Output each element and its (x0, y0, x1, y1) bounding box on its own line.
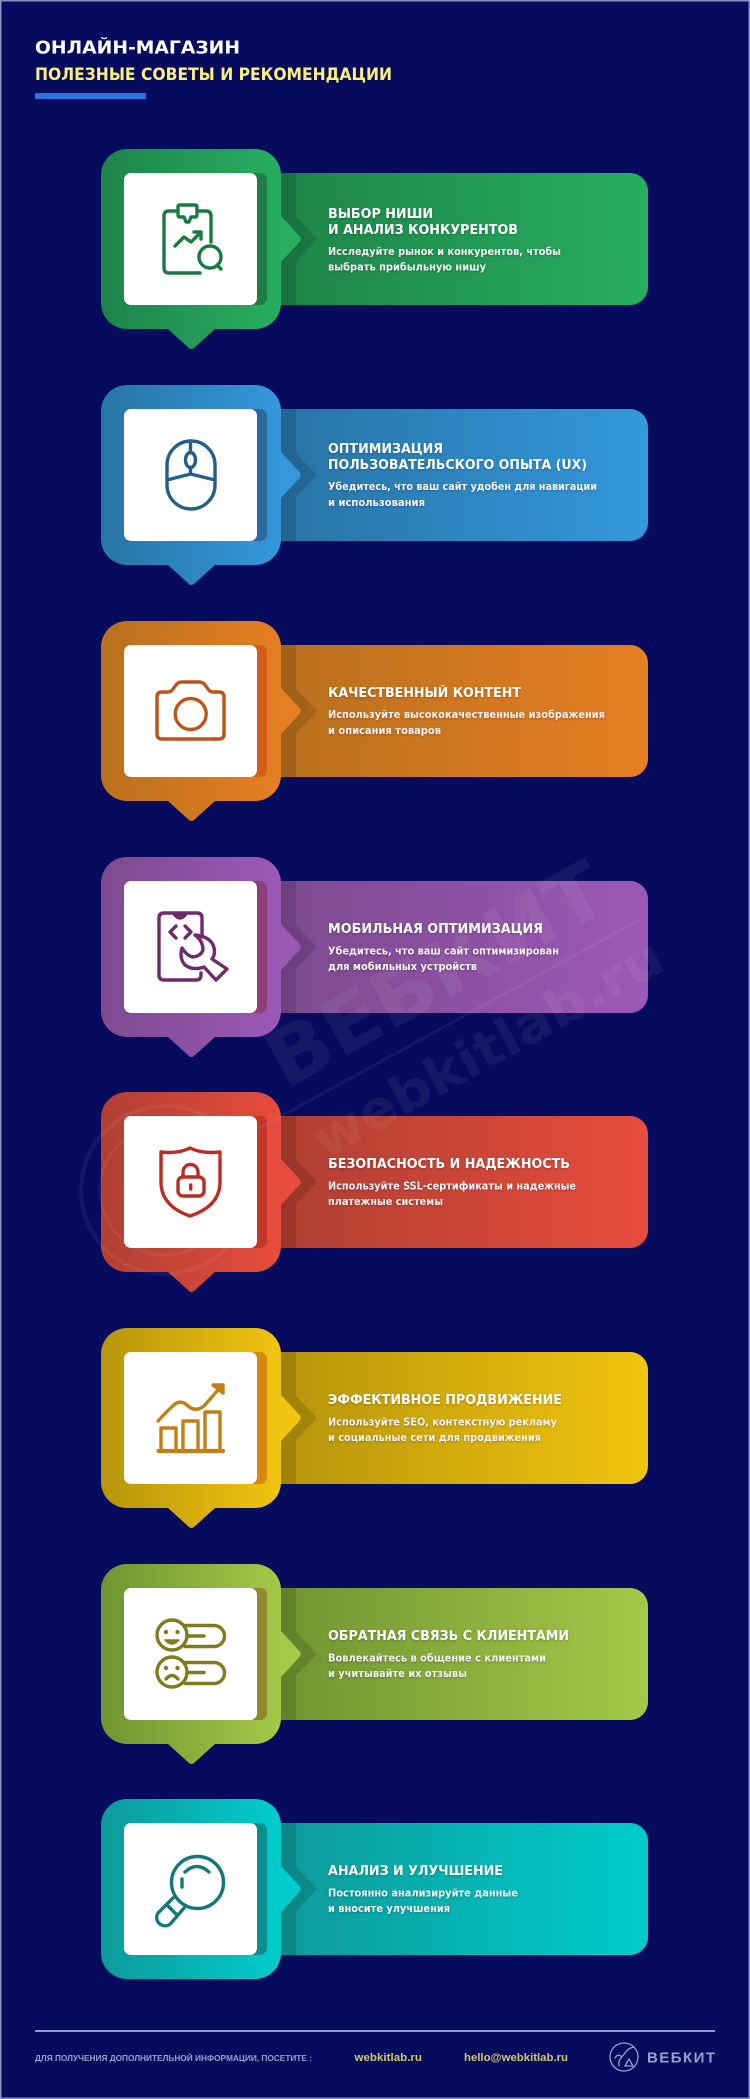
watermark: ВЕБКИТ (250, 845, 622, 1107)
text: promotion: и социальные сети для продвижения (328, 1431, 541, 1444)
text: niche selection: ВЫБОР НИШИ (328, 207, 433, 222)
text: mobile optimization: МОБИЛЬНАЯ ОПТИМИЗАЦИЯ (328, 922, 543, 937)
text: user experience: и использования (328, 496, 425, 509)
card 8: analysis (101, 1799, 648, 1979)
watermark (81, 845, 674, 1274)
card 4: mobile optimization (101, 857, 648, 1057)
text: niche selection: И АНАЛИЗ КОНКУРЕНТОВ (328, 223, 518, 238)
watermark: webkitlab.ru (302, 927, 674, 1171)
text: analysis (328, 1864, 518, 1915)
card 6: promotion (101, 1328, 648, 1528)
card 3: quality content (101, 621, 648, 821)
text: quality content: Используйте высококачественные изображения (328, 708, 605, 721)
website link: webkitlab.ru (353, 2052, 422, 2064)
text: user experience: ПОЛЬЗОВАТЕЛЬСКОГО ОПЫТА (UX) (328, 458, 587, 473)
text: security (328, 1157, 576, 1208)
icon: phone with wrench (159, 913, 227, 980)
icon: computer mouse (167, 441, 215, 509)
text: analysis: Постоянно анализируйте данные (328, 1887, 518, 1900)
text: analysis: АНАЛИЗ И УЛУЧШЕНИЕ (328, 1864, 503, 1879)
text: user experience (328, 442, 597, 509)
text: customer feedback: Вовлекайтесь в общение с клиентами (328, 1652, 546, 1665)
subtitle: ПОЛЕЗНЫЕ СОВЕТЫ И РЕКОМЕНДАЦИИ (35, 65, 392, 84)
icon: magnifying glass (157, 1856, 224, 1926)
icon: clipboard with chart and magnifier (164, 205, 221, 273)
header (35, 36, 392, 99)
logo wordmark: ВЕБКИТ (647, 2050, 715, 2067)
text: analysis: и вносите улучшения (328, 1902, 450, 1915)
text: user experience: ОПТИМИЗАЦИЯ (328, 442, 443, 457)
email link: hello@webkitlab.ru (464, 2052, 568, 2064)
text: customer feedback: ОБРАТНАЯ СВЯЗЬ С КЛИЕНТАМИ (328, 1629, 569, 1644)
text: customer feedback: и учитывайте их отзывы (328, 1667, 467, 1680)
icon: growth chart (158, 1385, 223, 1451)
text: promotion (328, 1393, 562, 1444)
text: mobile optimization (328, 922, 559, 973)
card 5: security (101, 1092, 648, 1292)
card 1: niche selection (101, 149, 648, 349)
title: ОНЛАЙН-МАГАЗИН (35, 36, 240, 58)
card 2: user experience (101, 385, 648, 585)
text: mobile optimization: для мобильных устройств (328, 960, 477, 973)
icon: feedback sliders with faces (157, 1620, 224, 1687)
text: niche selection (328, 207, 561, 274)
text: user experience: Убедитесь, что ваш сайт удобен для навигации (328, 480, 597, 493)
text: mobile optimization: Убедитесь, что ваш сайт оптимизирован (328, 945, 559, 958)
text: niche selection: Исследуйте рынок и конкурентов, чтобы (328, 245, 561, 258)
logo emblem (610, 2043, 638, 2071)
text: niche selection: выбрать прибыльную нишу (328, 260, 486, 274)
text: promotion: ЭФФЕКТИВНОЕ ПРОДВИЖЕНИЕ (328, 1393, 562, 1408)
icon: camera (157, 682, 224, 739)
footer note: ДЛЯ ПОЛУЧЕНИЯ ДОПОЛНИТЕЛЬНОЙ ИНФОРМАЦИИ, ПОСЕТИТЕ : (35, 2052, 312, 2063)
footer (35, 2030, 715, 2071)
icon: shield with lock (161, 1148, 220, 1216)
text: security: платежные системы (328, 1195, 443, 1208)
text: security: БЕЗОПАСНОСТЬ И НАДЕЖНОСТЬ (328, 1157, 570, 1172)
card 7: customer feedback (101, 1564, 648, 1764)
text: promotion: Используйте SEO, контекстную рекламу (328, 1416, 557, 1429)
accent bar (35, 93, 146, 99)
text: quality content (328, 685, 605, 737)
text: quality content: КАЧЕСТВЕННЫЙ КОНТЕНТ (328, 685, 521, 701)
text: customer feedback (328, 1629, 569, 1680)
text: quality content: и описания товаров (328, 724, 441, 737)
text: security: Используйте SSL-сертификаты и надежные (328, 1180, 576, 1193)
